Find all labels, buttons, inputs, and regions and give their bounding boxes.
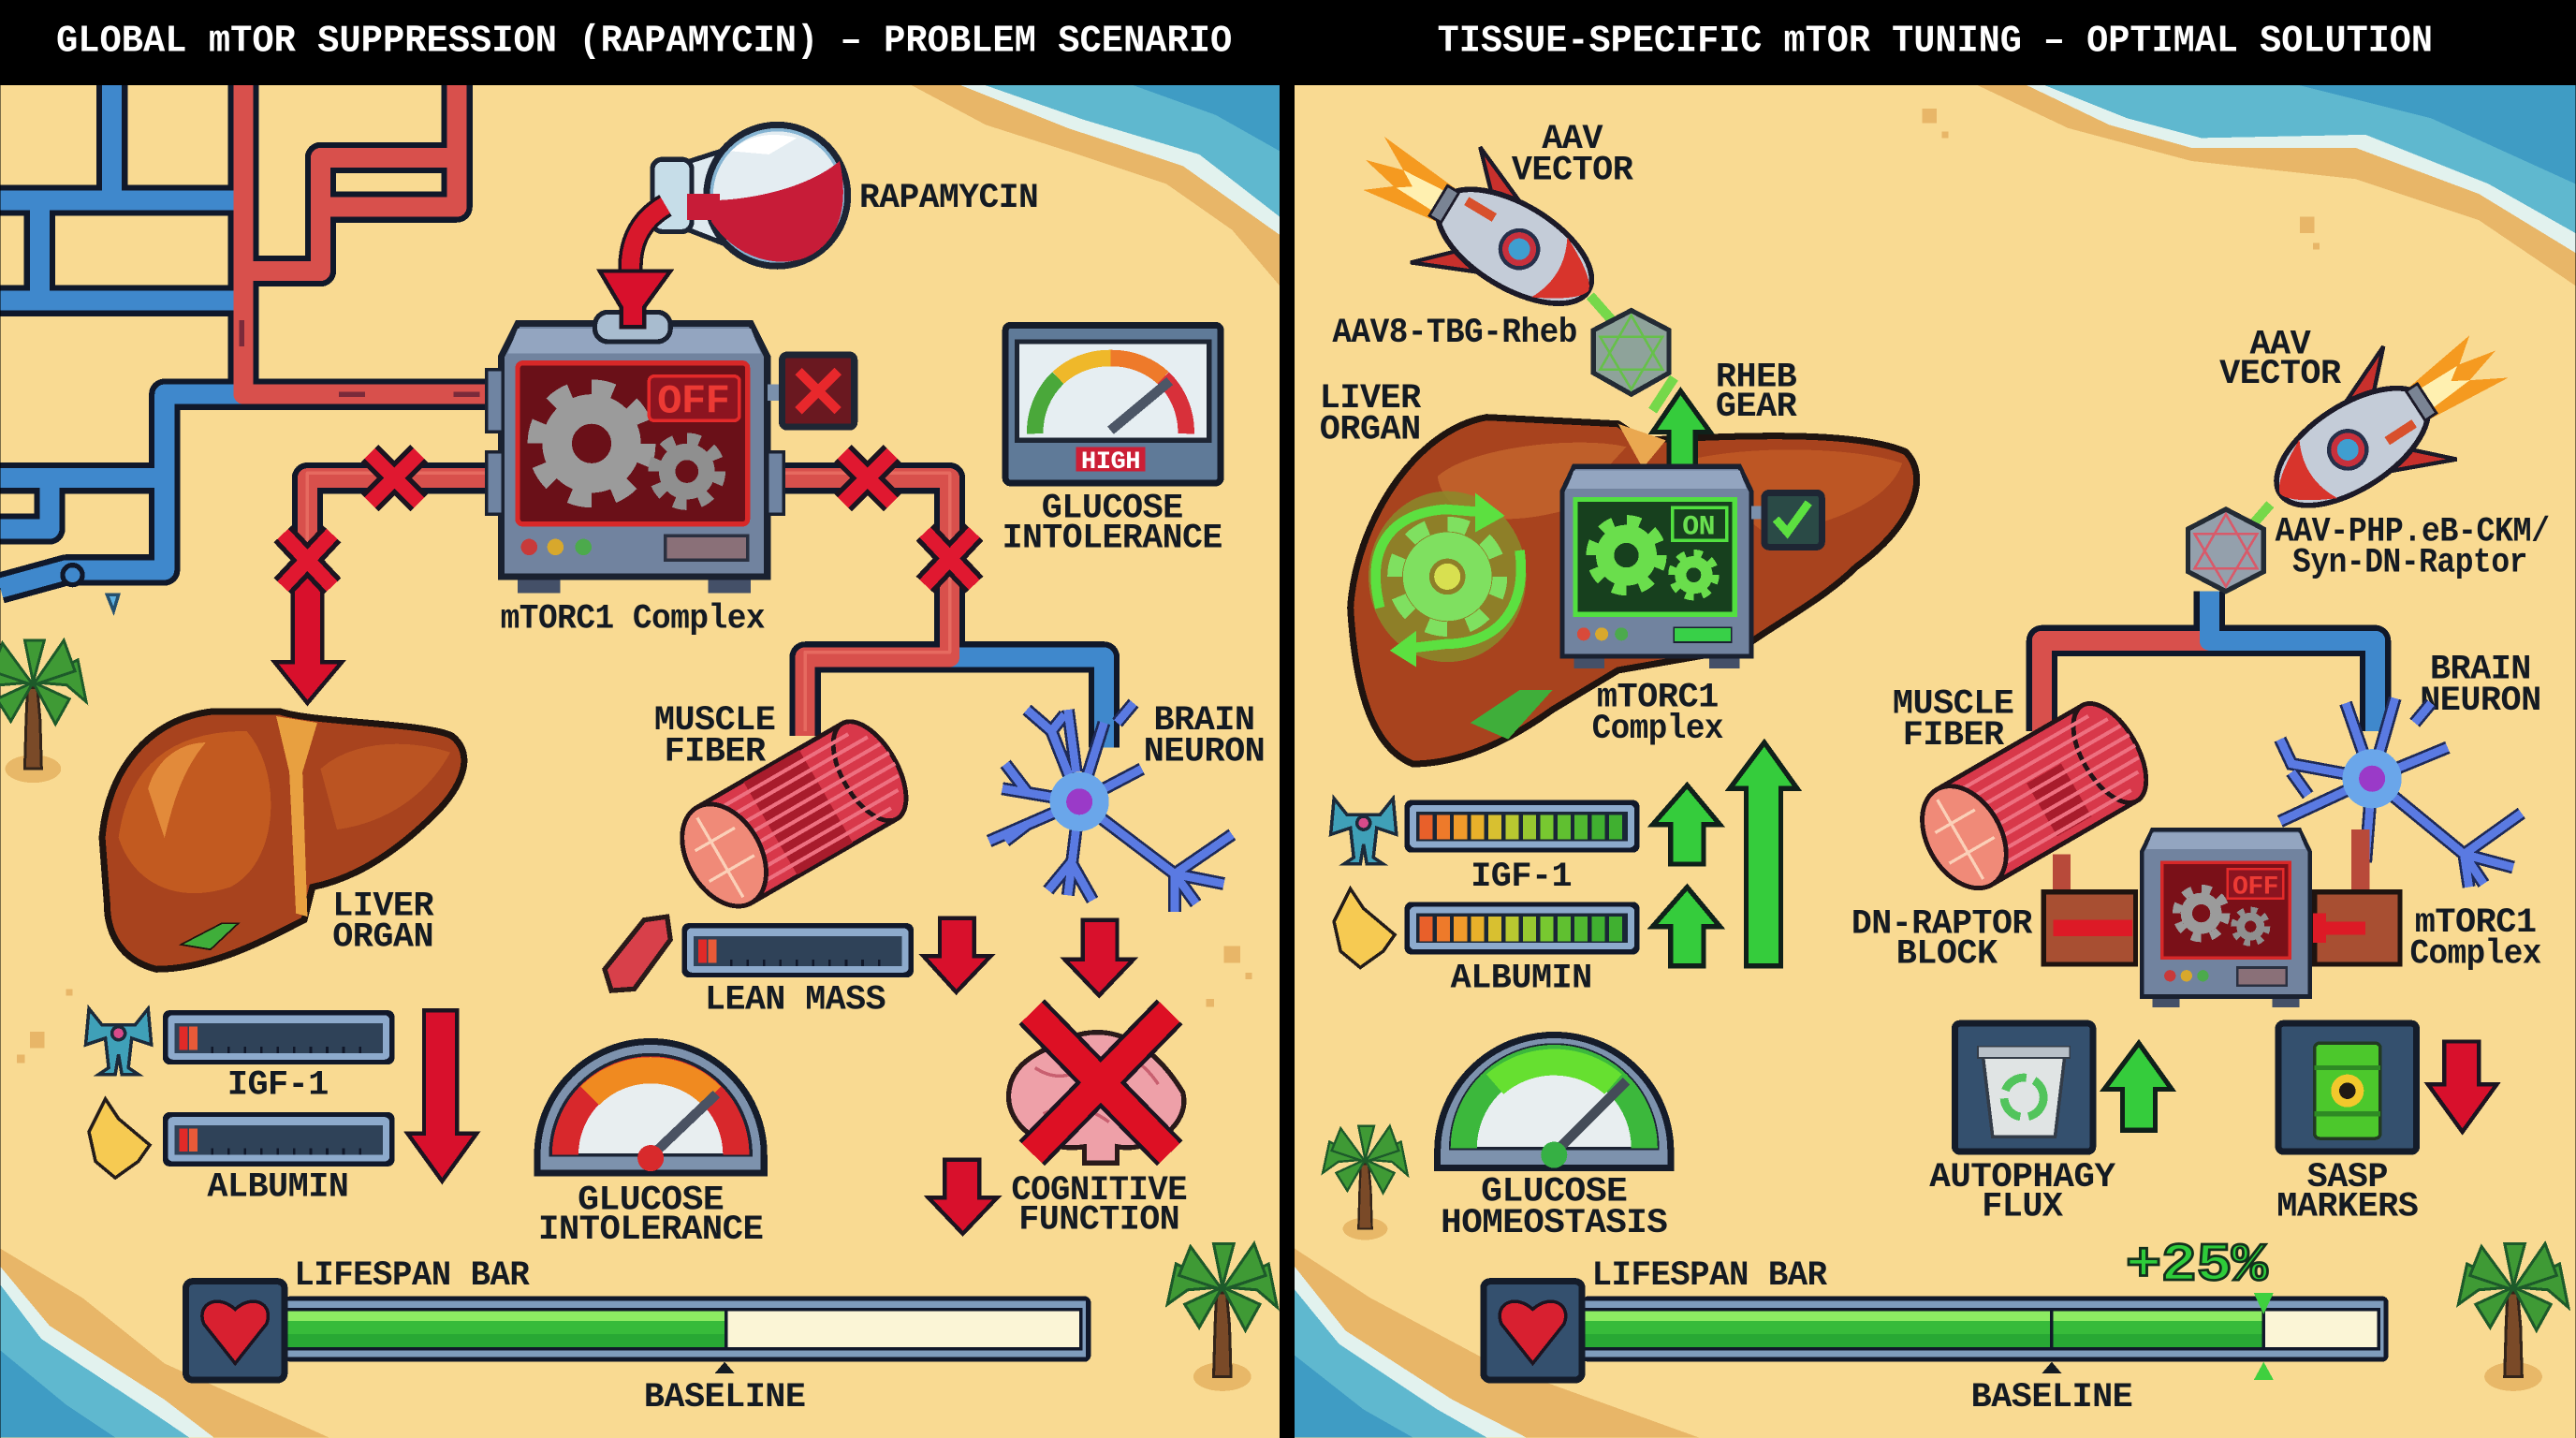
pipes: blocked signal to organs	[307, 473, 1104, 747]
gauge: glucose intolerance top: HIGH	[1081, 448, 1140, 477]
label: glucose homeostasis: GLUCOSE	[1481, 1173, 1627, 1212]
centre divider	[1280, 0, 1295, 1438]
arrow up: autophagy	[2104, 1043, 2172, 1130]
organ: brain neuron left	[989, 703, 1232, 912]
icon: meat chunk	[605, 917, 670, 990]
label: mTORC1 liver	[1592, 679, 1723, 749]
label: DN-Raptor block	[1852, 905, 2033, 974]
connector: rocket 2 to capsid	[2237, 505, 2270, 542]
machine: mTORC1 on: ON	[1682, 510, 1715, 542]
label: glucose intolerance lower	[538, 1181, 763, 1250]
decorative palm: right large	[2458, 1243, 2569, 1391]
label: cognitive function	[1011, 1171, 1187, 1240]
organ: muscle fiber right	[1905, 692, 2161, 903]
gauge: glucose homeostasis	[1438, 1034, 1671, 1168]
title: right panel: TISSUE-SPECIFIC mTOR TUNING – OPTIMAL SOLUTION	[1438, 20, 2433, 63]
baseline marker left	[715, 1362, 735, 1373]
label: brain neuron right: NEURON	[2420, 682, 2541, 721]
icon: heart left	[186, 1282, 285, 1380]
label: liver organ right: ORGAN	[1320, 411, 1421, 450]
label: AAV vector right	[2219, 325, 2342, 394]
label: AAV vector top: VECTOR	[1512, 151, 1634, 190]
bar: IGF-1 right	[1405, 800, 1640, 853]
label: plus 25 percent: +25%	[2126, 1236, 2268, 1297]
label: lean mass: LEAN MASS	[705, 980, 886, 1020]
label: muscle fiber left: MUSCLE	[654, 701, 775, 741]
label: glucose homeostasis	[1441, 1173, 1667, 1243]
label: IGF-1 right: IGF-1	[1471, 858, 1572, 897]
status x box	[768, 355, 855, 427]
rocket: AAV vector for CNS/muscle	[2244, 297, 2534, 550]
label: lifespan bar left: LIFESPAN BAR	[294, 1256, 531, 1296]
connector: capsid to arrow	[1653, 378, 1674, 411]
label: AAV vector right: VECTOR	[2219, 355, 2342, 394]
label: AAV-PHP.eB: AAV-PHP.eB-CKM/	[2276, 512, 2550, 551]
bar: albumin right	[1405, 902, 1640, 954]
decorative palm: left lower	[1167, 1243, 1277, 1391]
rocket: AAV vector for liver	[1332, 100, 1623, 348]
label: DN-Raptor block: BLOCK	[1896, 934, 1998, 974]
label: baseline left: BASELINE	[644, 1378, 805, 1417]
label: Rheb gear: RHEB	[1716, 358, 1797, 397]
machine: mTORC1 on	[1562, 466, 1751, 668]
arrow up: albumin	[1653, 888, 1720, 966]
arrow: rapamycin into machine	[600, 271, 670, 327]
label: brain neuron right	[2420, 651, 2541, 721]
arrow up: IGF-1	[1653, 785, 1720, 864]
label: AAV-PHP.eB: Syn-DN-Raptor	[2292, 544, 2527, 583]
long arrow down	[407, 1010, 476, 1181]
lifespan bar right	[1582, 1296, 2389, 1362]
shoreline: right panel top right	[1978, 85, 2576, 286]
label: AAV vector top	[1512, 120, 1634, 190]
machine: mTORC1 off: OFF	[657, 378, 729, 425]
label: SASP markers: MARKERS	[2276, 1187, 2418, 1226]
icon: brain with cross	[1008, 1012, 1184, 1163]
panel background: right beach	[1295, 85, 2576, 1438]
icon: capsid Rheb	[1593, 311, 1669, 394]
label: muscle fiber left: FIBER	[665, 732, 767, 771]
pipe network: systemic vessels	[0, 85, 493, 611]
label: liver organ right: LIVER	[1320, 379, 1422, 418]
arrow down: cognition	[1064, 920, 1134, 995]
icon: heart right	[1484, 1282, 1582, 1380]
label: mTORC1 liver: Complex	[1592, 710, 1723, 749]
machine: mTORC1 off	[487, 312, 783, 593]
label: autophagy flux	[1929, 1158, 2116, 1226]
icon: glowing green gear in liver	[1376, 492, 1521, 667]
label: mTORC1 tissue	[2409, 903, 2541, 974]
label: glucose intolerance top: INTOLERANCE	[1003, 519, 1222, 558]
header bar	[0, 0, 2576, 85]
label: lifespan bar right: LIFESPAN BAR	[1592, 1256, 1828, 1296]
status check box	[1751, 492, 1822, 547]
shoreline: left panel bottom left	[0, 1249, 329, 1437]
bar: albumin left	[163, 1112, 394, 1167]
label: DN-Raptor block: DN-RAPTOR	[1852, 905, 2033, 945]
bar: IGF-1 left	[163, 1010, 394, 1064]
pipes: right panel	[2042, 592, 2376, 731]
decorative palm: right small	[1323, 1126, 1408, 1240]
label: muscle fiber right	[1893, 685, 2013, 756]
label: brain neuron left: NEURON	[1144, 732, 1265, 771]
label: SASP markers: SASP	[2307, 1158, 2388, 1197]
gauge: glucose intolerance top	[1005, 325, 1221, 483]
label: AAV vector right: AAV	[2249, 325, 2312, 364]
arrow down: lean mass	[923, 918, 990, 992]
label: mTORC1 liver: mTORC1	[1597, 679, 1719, 718]
arrow up: rheb	[1653, 391, 1710, 468]
decorative palm: left upper	[0, 640, 86, 783]
label: Rheb gear	[1716, 358, 1798, 427]
DN-Raptor brick block right	[2315, 892, 2400, 964]
label: liver organ left: LIVER	[332, 887, 435, 926]
organ: liver right	[1351, 418, 1917, 764]
stems to DN-Raptor block	[2061, 829, 2361, 895]
arrow down: cognitive function	[929, 1160, 997, 1234]
label: mTORC1 left: mTORC1 Complex	[501, 599, 766, 638]
shoreline: right panel bottom left	[1295, 1249, 1699, 1437]
label: glucose intolerance top: GLUCOSE	[1042, 490, 1183, 529]
organ: muscle fiber left	[665, 710, 921, 921]
label: albumin right: ALBUMIN	[1451, 960, 1592, 999]
lifespan bar left	[285, 1296, 1090, 1362]
machine: mTORC1 off in tissue	[2142, 829, 2310, 1007]
icon: SASP toxic barrel	[2278, 1023, 2416, 1152]
panel background: left beach	[0, 85, 1280, 1438]
label: liver organ right	[1320, 379, 1422, 450]
label: IGF-1 left: IGF-1	[227, 1066, 329, 1106]
baseline marker right	[2042, 1362, 2061, 1373]
organ: liver left	[102, 712, 464, 969]
label: brain neuron left: BRAIN	[1154, 701, 1254, 741]
label: Rheb gear: GEAR	[1716, 388, 1798, 427]
gain markers	[2254, 1293, 2274, 1380]
icon: IGF-1 left	[86, 1008, 152, 1075]
icon: albumin right	[1334, 888, 1395, 968]
label: baseline right: BASELINE	[1971, 1378, 2132, 1417]
icon: autophagy recycle bin	[1954, 1023, 2093, 1152]
DN-Raptor brick block left	[2043, 892, 2135, 964]
label: glucose intolerance top	[1003, 490, 1222, 558]
label: glucose homeostasis: HOMEOSTASIS	[1441, 1204, 1667, 1243]
label: rapamycin: RAPAMYCIN	[859, 179, 1038, 218]
gauge: glucose intolerance lower	[537, 1041, 764, 1173]
label: AAV8-TBG-Rheb: AAV8-TBG-Rheb	[1332, 314, 1577, 353]
label: muscle fiber right: MUSCLE	[1893, 685, 2013, 725]
label: cognitive function: COGNITIVE	[1011, 1171, 1187, 1211]
sand specks	[17, 109, 2320, 1063]
label: cognitive function: FUNCTION	[1018, 1201, 1179, 1240]
shoreline: left panel top right	[912, 85, 1280, 286]
connector: rocket to capsid	[1590, 296, 1626, 337]
icon: IGF-1 right	[1331, 799, 1397, 864]
label: albumin left: ALBUMIN	[207, 1167, 348, 1207]
label: autophagy flux: AUTOPHAGY	[1929, 1158, 2116, 1197]
label: mTORC1 tissue: mTORC1	[2415, 903, 2537, 943]
organ: brain neuron right	[2280, 698, 2522, 888]
label: brain neuron right: BRAIN	[2430, 651, 2531, 690]
label: glucose intolerance lower: GLUCOSE	[578, 1181, 724, 1220]
label: AAV vector top: AAV	[1542, 120, 1603, 159]
label: muscle fiber right: FIBER	[1903, 716, 2005, 756]
block marks on pipes	[283, 453, 974, 586]
label: mTORC1 tissue: Complex	[2409, 934, 2541, 974]
title: left panel: GLOBAL mTOR SUPPRESSION (RAPAMYCIN) – PROBLEM SCENARIO	[56, 20, 1232, 63]
label: liver organ left	[332, 887, 435, 958]
label: glucose intolerance lower: INTOLERANCE	[538, 1211, 763, 1250]
long arrow up	[1730, 742, 1797, 966]
arrow down: SASP	[2428, 1041, 2496, 1132]
label: SASP markers	[2276, 1158, 2418, 1226]
icon: capsid DN-Raptor	[2188, 509, 2263, 592]
label: muscle fiber left	[654, 701, 775, 771]
machine: mTORC1 off in tissue: OFF	[2232, 873, 2278, 902]
icon: albumin left	[89, 1099, 150, 1178]
bar: lean mass	[682, 923, 914, 977]
label: liver organ left: ORGAN	[332, 918, 433, 958]
label: autophagy flux: FLUX	[1982, 1187, 2064, 1226]
label: AAV-PHP.eB	[2276, 512, 2550, 583]
label: brain neuron left	[1144, 701, 1265, 771]
icon: rapamycin flask	[630, 125, 848, 279]
big red arrow to liver	[274, 566, 342, 703]
